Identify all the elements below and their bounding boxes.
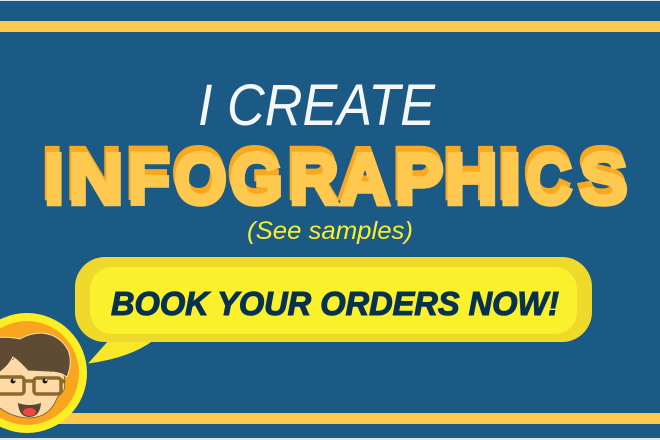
speech bubble [75, 257, 592, 364]
heading: INFOGRAPHICS: N [67, 134, 122, 214]
heading: I CREATE: I CREATE [198, 73, 436, 138]
icon: mouth [18, 403, 41, 417]
heading: INFOGRAPHICS: O [172, 134, 225, 214]
icon: glasses [0, 377, 65, 394]
heading: INFOGRAPHICS: G [230, 140, 283, 220]
heading: INFOGRAPHICS: R [289, 140, 339, 220]
heading: INFOGRAPHICS: A [338, 134, 388, 214]
heading: INFOGRAPHICS: S [580, 140, 628, 220]
heading: INFOGRAPHICS: N [69, 140, 124, 220]
avatar [0, 313, 87, 433]
heading: INFOGRAPHICS: S [578, 134, 626, 214]
heading: INFOGRAPHICS: P [395, 140, 444, 220]
heading: INFOGRAPHICS [42, 134, 628, 220]
heading: INFOGRAPHICS: F [126, 134, 168, 214]
heading: INFOGRAPHICS: I [500, 140, 521, 220]
icon: face [0, 355, 65, 418]
icon: eyes [10, 378, 48, 384]
heading: INFOGRAPHICS: C [526, 140, 572, 220]
heading: INFOGRAPHICS: P [393, 134, 442, 214]
heading: INFOGRAPHICS: H [445, 140, 498, 220]
button text: BOOK YOUR ORDERS NOW! [111, 285, 559, 322]
heading: INFOGRAPHICS: A [340, 140, 390, 220]
heading: INFOGRAPHICS: G [228, 134, 281, 214]
heading: INFOGRAPHICS: F [128, 140, 170, 220]
heading: INFOGRAPHICS: H [443, 134, 496, 214]
heading: INFOGRAPHICS: O [174, 140, 227, 220]
subtitle: (See samples) [247, 217, 413, 245]
icon: hair [0, 333, 70, 377]
top bar [0, 21, 660, 32]
bottom bar [0, 413, 660, 424]
heading: INFOGRAPHICS: I [498, 134, 519, 214]
heading: INFOGRAPHICS: C [524, 134, 570, 214]
heading: INFOGRAPHICS: R [287, 134, 337, 214]
heading: INFOGRAPHICS: I [44, 140, 64, 220]
heading: INFOGRAPHICS: I [42, 134, 62, 214]
